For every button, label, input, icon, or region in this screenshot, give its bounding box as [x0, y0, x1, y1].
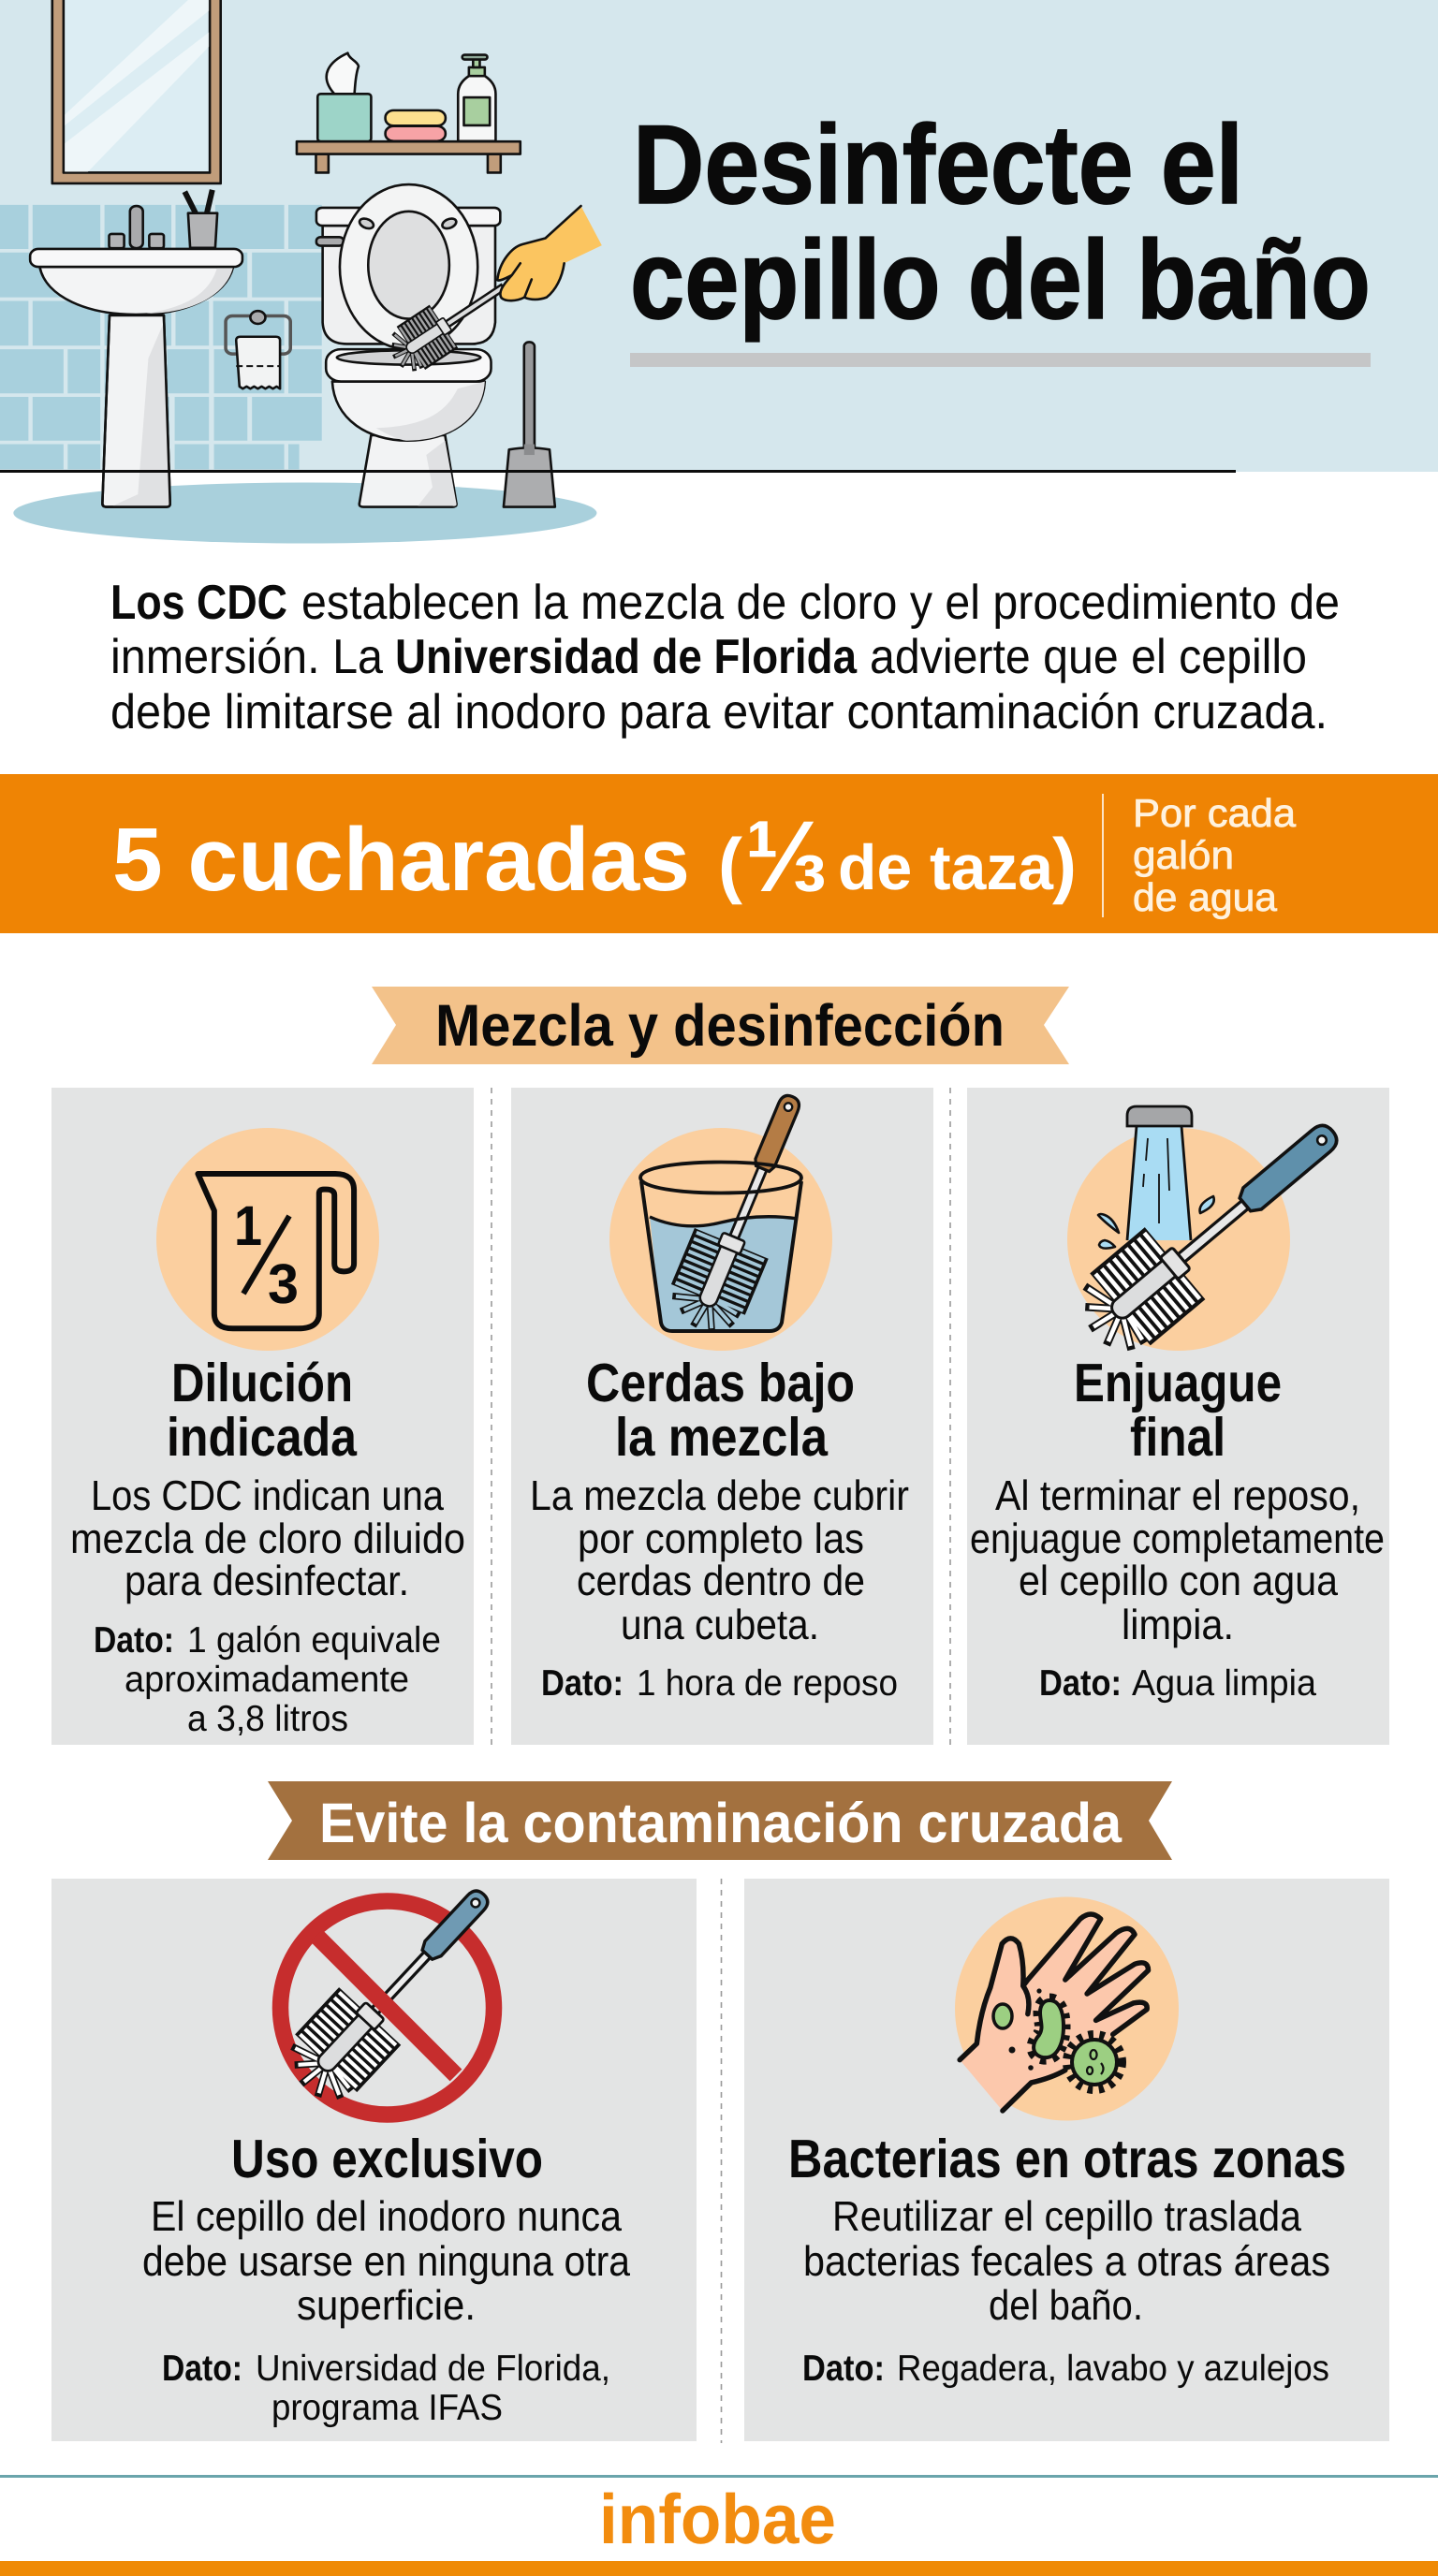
floor line [0, 470, 1236, 473]
dato: Dato: [162, 2349, 242, 2389]
body text: una cubeta. [621, 1601, 819, 1648]
body text [70, 1471, 465, 1604]
wall tiles [0, 205, 322, 469]
sink [30, 190, 242, 507]
heading [167, 1353, 358, 1468]
body text [803, 2192, 1330, 2329]
intro paragraph [110, 576, 1340, 739]
body text: el cepillo con agua [1019, 1557, 1339, 1604]
unit note: Por cada [1133, 791, 1297, 835]
gloved hand [497, 206, 602, 300]
panel: bacterias en otras zonas [744, 1879, 1389, 2441]
section ribbon: Mezcla y desinfección: Mezcla y desinfección [435, 993, 1005, 1059]
body text: bacterias fecales a otras áreas [803, 2237, 1330, 2285]
footer rule [0, 2475, 1438, 2478]
icon: measuring jug one third [156, 1128, 379, 1351]
key figure: ) [1052, 823, 1077, 905]
body text: por completo las [578, 1515, 864, 1562]
dato: Dato: [802, 2349, 885, 2389]
dato: Dato: [541, 1663, 624, 1704]
heading: Uso exclusivo [231, 2129, 543, 2189]
dato: programa IFAS [271, 2388, 503, 2428]
dato: a 3,8 litros [187, 1699, 348, 1739]
body text: La mezcla debe cubrir [530, 1471, 909, 1519]
logo: infobae: infobae [599, 2480, 836, 2558]
panel: uso exclusivo [51, 1879, 697, 2441]
dato: Universidad de Florida, [256, 2349, 610, 2389]
mirror [52, 0, 221, 183]
intro paragraph: Los CDC [110, 576, 287, 630]
body text: Reutilizar el cepillo traslada [832, 2192, 1302, 2240]
intro paragraph: debe limitarse al inodoro para evitar contaminación cruzada. [110, 685, 1328, 739]
panel: dilución indicada [51, 1088, 474, 1745]
brush held over toilet [383, 268, 516, 377]
heading: Enjuague [1074, 1353, 1282, 1413]
body text: del baño. [989, 2281, 1143, 2329]
body text: mezcla de cloro diluido [70, 1515, 465, 1562]
dato: Dato: [1039, 1663, 1122, 1704]
toilet paper [226, 311, 290, 388]
icon: hand with bacteria [955, 1896, 1179, 2121]
heading: Dilución [171, 1353, 353, 1413]
heading: indicada [167, 1407, 358, 1468]
title [630, 102, 1371, 343]
dato: Agua limpia [1132, 1663, 1316, 1704]
key figure: de taza [838, 832, 1054, 903]
body text: limpia. [1122, 1601, 1234, 1648]
floor rug [13, 482, 596, 544]
heading: Bacterias en otras zonas [788, 2129, 1346, 2189]
heading: la mezcla [615, 1407, 829, 1468]
shelf with toiletries [297, 53, 521, 172]
unit note: galón [1133, 833, 1234, 877]
icon: measuring jug one third: 1 [234, 1194, 262, 1257]
dato: 1 galón equivale [187, 1620, 441, 1661]
intro paragraph: advierte que el cepillo [870, 630, 1307, 684]
title underline [630, 353, 1371, 367]
dato [94, 1620, 441, 1739]
heading: Cerdas bajo [586, 1353, 855, 1413]
intro paragraph: inmersión. La [110, 630, 383, 684]
icon: measuring jug one third: 3 [268, 1252, 299, 1315]
dato: 1 hora de reposo [637, 1663, 898, 1704]
intro paragraph: Universidad de Florida [395, 630, 858, 684]
header background [0, 0, 1438, 472]
body text [142, 2192, 631, 2329]
body text: superficie. [297, 2281, 476, 2329]
icon: prohibited brush on other surfaces [278, 1887, 494, 2115]
icon: brush in bucket [609, 1083, 832, 1351]
dato: Regadera, lavabo y azulejos [897, 2349, 1329, 2389]
key figure: ( [718, 823, 742, 905]
unit note: de agua [1133, 875, 1278, 919]
bacteria [993, 1988, 1120, 2087]
body text: enjuague completamente [970, 1515, 1385, 1562]
section ribbon: Evite la contaminación cruzada: Evite la contaminación cruzada [319, 1792, 1123, 1854]
dato: aproximadamente [125, 1660, 409, 1700]
unit note [1133, 791, 1297, 919]
heading [1074, 1353, 1282, 1468]
body text [970, 1471, 1385, 1648]
body text: para desinfectar. [125, 1557, 409, 1604]
dato: Dato: [94, 1620, 174, 1661]
title: Desinfecte el [633, 102, 1243, 227]
body text [530, 1471, 909, 1648]
body text: Al terminar el reposo, [995, 1471, 1360, 1519]
key figure [112, 799, 1077, 913]
intro paragraph: establecen la mezcla de cloro y el procedimiento de [301, 576, 1340, 630]
body text: Los CDC indican una [91, 1471, 445, 1519]
orange banner [0, 774, 1438, 933]
illustration: bathroom scene [0, 0, 602, 544]
panel: cerdas bajo la mezcla [511, 1083, 933, 1745]
body text: cerdas dentro de [577, 1557, 865, 1604]
standing toilet brush [504, 342, 555, 507]
body text: El cepillo del inodoro nunca [151, 2192, 623, 2240]
toilet [316, 184, 500, 507]
icon: brush under running water [1067, 1098, 1360, 1363]
dato [1039, 1663, 1316, 1704]
heading [586, 1353, 855, 1468]
panel: enjuague final [967, 1088, 1389, 1745]
dato [162, 2349, 610, 2428]
heading: final [1130, 1407, 1225, 1468]
footer bar [0, 2561, 1438, 2576]
key figure: 5 cucharadas [112, 810, 690, 910]
body text: debe usarse en ninguna otra [142, 2237, 631, 2285]
key figure: ⅓ [745, 799, 828, 913]
